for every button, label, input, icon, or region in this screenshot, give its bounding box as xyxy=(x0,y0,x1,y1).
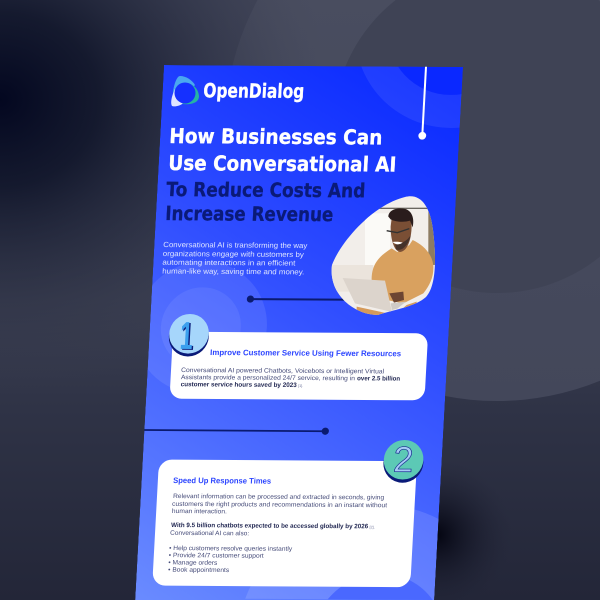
infographic poster xyxy=(135,65,463,600)
icon: logo mark xyxy=(171,76,199,106)
body 1: [1]. xyxy=(298,384,303,388)
body 2: customers the right products and recommendations in an instant without xyxy=(172,501,388,509)
badge 1: 1 xyxy=(179,315,194,358)
title: Increase Revenue xyxy=(165,202,334,226)
body 1: Conversational AI powered Chatbots, Voicebots or Intelligent Virtual xyxy=(181,367,384,375)
intro text: organizations engage with customers by xyxy=(163,249,304,259)
title xyxy=(164,124,399,227)
body 2: With 9.5 billion chatbots expected to be accessed globally by 2026 xyxy=(171,522,369,530)
body 2: Conversational AI can also: xyxy=(170,530,250,537)
heading 2: Speed Up Response Times xyxy=(173,476,272,486)
heading 1: Improve Customer Service Using Fewer Resources xyxy=(210,348,402,358)
badge 1 xyxy=(168,314,210,359)
body 2: human interaction. xyxy=(172,508,227,515)
intro text: Conversational AI is transforming the way xyxy=(163,240,308,250)
body 2 xyxy=(168,493,388,575)
photo: man with laptop xyxy=(332,196,435,315)
body 2: • Book appointments xyxy=(168,567,229,574)
brand name: OpenDialog xyxy=(203,79,305,103)
title: To Reduce Costs And xyxy=(166,178,366,202)
body 1: Assistants provide a personalized 24/7 service, resulting in xyxy=(181,374,356,382)
badge 2 xyxy=(382,439,425,483)
panel: improve customer service xyxy=(165,314,429,400)
body 2: • Manage orders xyxy=(168,559,218,567)
poster background xyxy=(135,65,463,600)
intro text xyxy=(162,240,308,276)
body 1: over 2.5 billion xyxy=(357,375,400,383)
badge 2: 2 xyxy=(392,439,415,480)
body 1 xyxy=(180,367,401,390)
title: Use Conversational AI xyxy=(168,151,397,177)
body 2: • Help customers resolve queries instantly xyxy=(169,545,293,553)
intro text: automating interactions in an efficient xyxy=(162,258,296,268)
navy connector top xyxy=(247,295,357,303)
body 2: [2], xyxy=(370,525,375,529)
white connector xyxy=(418,67,430,140)
body 2: Relevant information can be processed and extracted in seconds, giving xyxy=(173,493,385,501)
body 1: customer service hours saved by 2023 xyxy=(181,381,297,389)
body 2: • Provide 24/7 customer support xyxy=(169,552,264,560)
navy connector middle xyxy=(144,426,329,435)
title: How Businesses Can xyxy=(169,124,383,149)
intro text: human-like way, saving time and money. xyxy=(162,266,305,276)
panel: speed up response times xyxy=(152,437,425,587)
badge 1: 1 xyxy=(180,316,195,359)
